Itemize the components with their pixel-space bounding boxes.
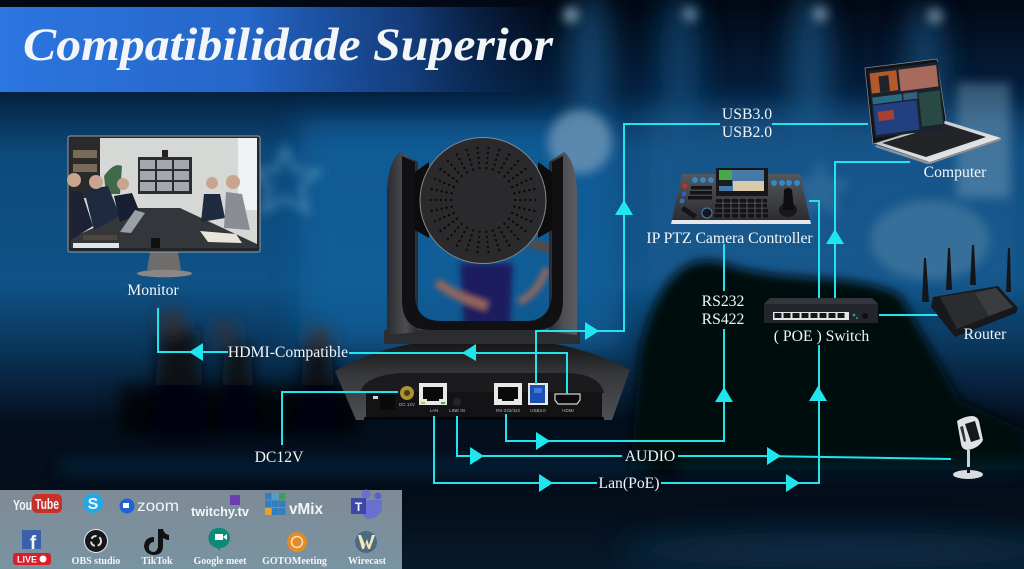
label: USB: USB2.0 (722, 124, 772, 141)
title: Compatibilidade Superior (23, 19, 554, 71)
logo: vMix: vMix (289, 501, 323, 518)
logo: Wirecast: Wirecast (348, 556, 387, 567)
title banner (0, 7, 554, 92)
logo: TikTok (141, 529, 173, 567)
label: AUDIO: AUDIO (625, 448, 675, 465)
rear port panel: DC 12V (399, 402, 415, 407)
computer (865, 59, 1001, 164)
logo: Teams (351, 490, 382, 519)
rear port panel: RS-232/422 (496, 408, 520, 413)
logo: Facebook Live (13, 530, 51, 565)
label: monitor: Monitor (127, 282, 179, 299)
logo: YouTube (13, 494, 62, 514)
logo: OBS (72, 530, 120, 567)
logo: Facebook Live: LIVE (17, 554, 37, 564)
label: HDMI: HDMI-Compatible (228, 344, 348, 361)
label: Lan PoE: Lan(PoE) (598, 475, 660, 492)
logo: twitchy.tv: twitchy.tv (191, 504, 250, 519)
label: DC12V: DC12V (255, 449, 304, 466)
camera (335, 138, 630, 420)
logo: GOTOMeeting (262, 532, 327, 567)
logo: YouTube: You (13, 497, 32, 514)
label: router: Router (964, 326, 1007, 343)
logo: Google meet (193, 528, 247, 567)
controller (671, 168, 811, 224)
label: computer: Computer (924, 164, 987, 181)
router (922, 245, 1018, 337)
label: switch: ( POE ) Switch (774, 328, 869, 345)
label: USB: USB3.0 (722, 106, 772, 123)
logo: Skype: S (88, 496, 99, 513)
label: controller: IP PTZ Camera Controller (646, 230, 813, 247)
logo: twitchy.tv (191, 495, 250, 519)
rear port panel (364, 383, 604, 420)
logo: Wirecast (348, 531, 387, 567)
arrows (189, 200, 844, 492)
POE switch (764, 298, 878, 323)
logo: Zoom (120, 498, 179, 515)
rear port panel: USB3.0 (530, 408, 546, 413)
logo: YouTube: Tube (35, 496, 59, 513)
logo: TikTok: TikTok (141, 556, 173, 567)
rear port panel: LAN (430, 408, 438, 413)
label: RS232 RS422: RS232 (702, 293, 744, 310)
monitor (67, 136, 260, 277)
logo: Facebook Live: f (30, 533, 37, 554)
label: RS232 RS422: RS422 (702, 311, 744, 328)
logo: Teams: T (355, 500, 363, 514)
logo: GOTOMeeting: GOTOMeeting (262, 556, 327, 567)
rear port panel: LINE IN (449, 408, 465, 413)
rear port panel: HDMI (562, 408, 574, 413)
speaker holes (427, 144, 539, 256)
logo: OBS: OBS studio (72, 556, 120, 567)
logo: Skype (83, 493, 103, 513)
microphone (953, 416, 983, 479)
logo: vMix (265, 493, 323, 518)
connection lines (158, 124, 951, 492)
logo: Zoom: zoom (137, 498, 179, 515)
logos panel (0, 490, 402, 569)
logo: Google meet: Google meet (193, 556, 247, 567)
